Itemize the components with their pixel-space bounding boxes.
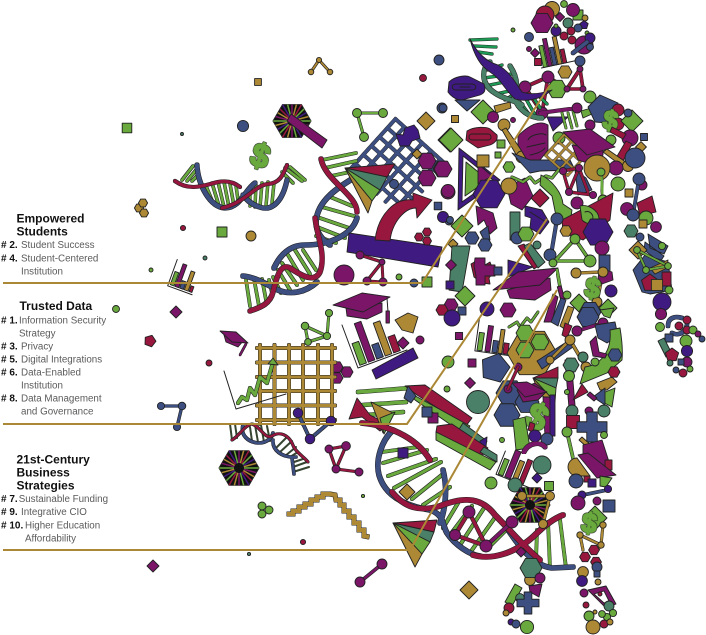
list: issues 1, 3, 5, 6, 8: # 5.: [1, 354, 18, 366]
scattered small shapes: [112, 55, 504, 599]
figure: bar chart in the head: [536, 33, 575, 68]
icon: gold pentagon and indigo bar: [331, 313, 418, 383]
heading: 21st-Century Business Strategies: Strategies: [16, 478, 75, 492]
figure: chest gold lattice and graduation cap: $: [601, 104, 621, 136]
heading: Empowered Students: Students: [16, 224, 68, 238]
icon: green dollar sign: $: [246, 136, 275, 175]
icon: line chart with green arrow: [224, 358, 286, 409]
figure: right thigh with green arrow: [562, 307, 622, 458]
list: issues 2 and 4: # 2.: [1, 240, 18, 251]
list: issues 1, 3, 5, 6, 8: Digital Integrations: [21, 354, 102, 366]
list: issues 2 and 4: Institution: [21, 266, 63, 278]
list: issues 7, 9, 10: Integrative CIO: [21, 507, 87, 518]
gold connector line: Empowered Students: [3, 85, 550, 283]
text block: Empowered Students: [1, 212, 98, 278]
list: issues 1, 3, 5, 6, 8: # 1.: [1, 316, 18, 326]
list: issues 1, 3, 5, 6, 8: Data-Enabled: [21, 368, 81, 378]
icon: gold molecule top: [308, 57, 333, 75]
figure: left foot: [503, 558, 545, 634]
list: issues 1, 3, 5, 6, 8: Strategy: [19, 328, 56, 340]
icon: green molecule: [352, 108, 388, 142]
list: issues 1, 3, 5, 6, 8: Information Security: [19, 316, 106, 326]
icon: magenta molecule bottom: [355, 559, 387, 587]
heading: 21st-Century Business Strategies: Business: [16, 466, 70, 480]
figure: waist cap and dollar: $: [583, 272, 603, 304]
figure: waist cap and dollar: [436, 241, 617, 340]
icon: blue molecule: [157, 402, 186, 431]
list: issues 1, 3, 5, 6, 8: Privacy: [21, 342, 53, 352]
list: issues 7, 9, 10: # 9.: [1, 507, 18, 518]
icon: gold grid: [257, 345, 335, 424]
icon: central DNA helix: [243, 153, 357, 311]
icon: indigo bar: [347, 233, 442, 267]
human figure built from icons: [434, 1, 705, 634]
figure: upper DNA helix: [470, 39, 552, 118]
list: issues 7, 9, 10: Sustainable Funding: [19, 494, 108, 505]
list: issues 7, 9, 10: Higher Education: [25, 520, 100, 532]
gold connector line: Trusted Data: [3, 219, 547, 424]
heading: 21st-Century Business Strategies: 21st-Century: [16, 452, 90, 466]
figure: knee cap and lower leg: $: [580, 507, 599, 539]
icon: ray hexagon lower: [218, 447, 260, 489]
icon: lower fan triangle: [393, 520, 437, 567]
icon: crimson molecule: [325, 442, 363, 476]
figure: right leg upper: [478, 294, 591, 528]
icon: indigo molecule: [293, 408, 336, 444]
figure: neck and shoulders: [519, 42, 596, 119]
icon: small graduation cap: [220, 331, 248, 355]
text block: 21st-Century Business Strategies: [1, 452, 108, 544]
list: issues 1, 3, 5, 6, 8: # 3.: [1, 342, 18, 352]
icon: green triangle molecule: [301, 309, 333, 345]
figure: hip bar chart: [475, 318, 514, 356]
figure: right foot: [580, 586, 617, 634]
figure: left arm: [611, 173, 705, 377]
icon: small crimson molecule: [356, 228, 432, 286]
icon: small bar chart: [168, 260, 202, 295]
icon: dark small DNA helix: [230, 424, 309, 474]
figure: head: [511, 1, 595, 66]
icon: bar chart: [342, 312, 409, 368]
list: issues 1, 3, 5, 6, 8: and Governance: [21, 406, 94, 418]
icon: large graduation cap: [333, 293, 390, 323]
list: issues 1, 3, 5, 6, 8: # 8.: [1, 394, 18, 404]
list: issues 7, 9, 10: # 10.: [1, 520, 23, 532]
list: issues 1, 3, 5, 6, 8: Institution: [21, 380, 63, 392]
icon: ray hexagon with magenta bar: [272, 101, 327, 148]
list: issues 1, 3, 5, 6, 8: Data Management: [21, 394, 102, 404]
list: issues 2 and 4: [1, 240, 98, 278]
list: issues 2 and 4: Student-Centered: [21, 254, 98, 264]
figure: molecule on lower helix: [450, 506, 526, 557]
list: issues 1, 3, 5, 6, 8: [1, 316, 106, 418]
figure: right leg upper: $: [520, 394, 555, 439]
icon: arrow stack with triangles: [349, 385, 497, 470]
list: issues 2 and 4: Student Success: [21, 240, 95, 251]
list: issues 1, 3, 5, 6, 8: # 6.: [1, 368, 18, 378]
list: issues 7, 9, 10: [1, 494, 108, 544]
text block: Trusted Data: [1, 299, 106, 418]
icon: blue lattice: [350, 119, 451, 215]
icon: gold zigzag: [287, 494, 369, 537]
icon: crimson curved arrow: [375, 193, 432, 241]
list: issues 7, 9, 10: # 7.: [1, 494, 18, 505]
list: issues 7, 9, 10: Affordability: [25, 534, 76, 544]
floating icons left of the figure: [112, 55, 573, 599]
figure: torso blocks and hexagons: [434, 76, 575, 306]
icon: small DNA helix: [175, 165, 305, 208]
figure: chest gold lattice and graduation cap: [540, 95, 648, 273]
icon: fan triangle: [345, 164, 395, 213]
heading: Trusted Data: Trusted Data: [20, 299, 93, 313]
icon: large lower DNA helix: [362, 423, 573, 568]
gold connector line: 21st-Century Business Strategies: [3, 290, 557, 550]
list: issues 2 and 4: # 4.: [1, 254, 18, 264]
figure: knee cap and lower leg: [568, 440, 616, 586]
heading: Empowered Students: Empowered: [16, 212, 85, 226]
